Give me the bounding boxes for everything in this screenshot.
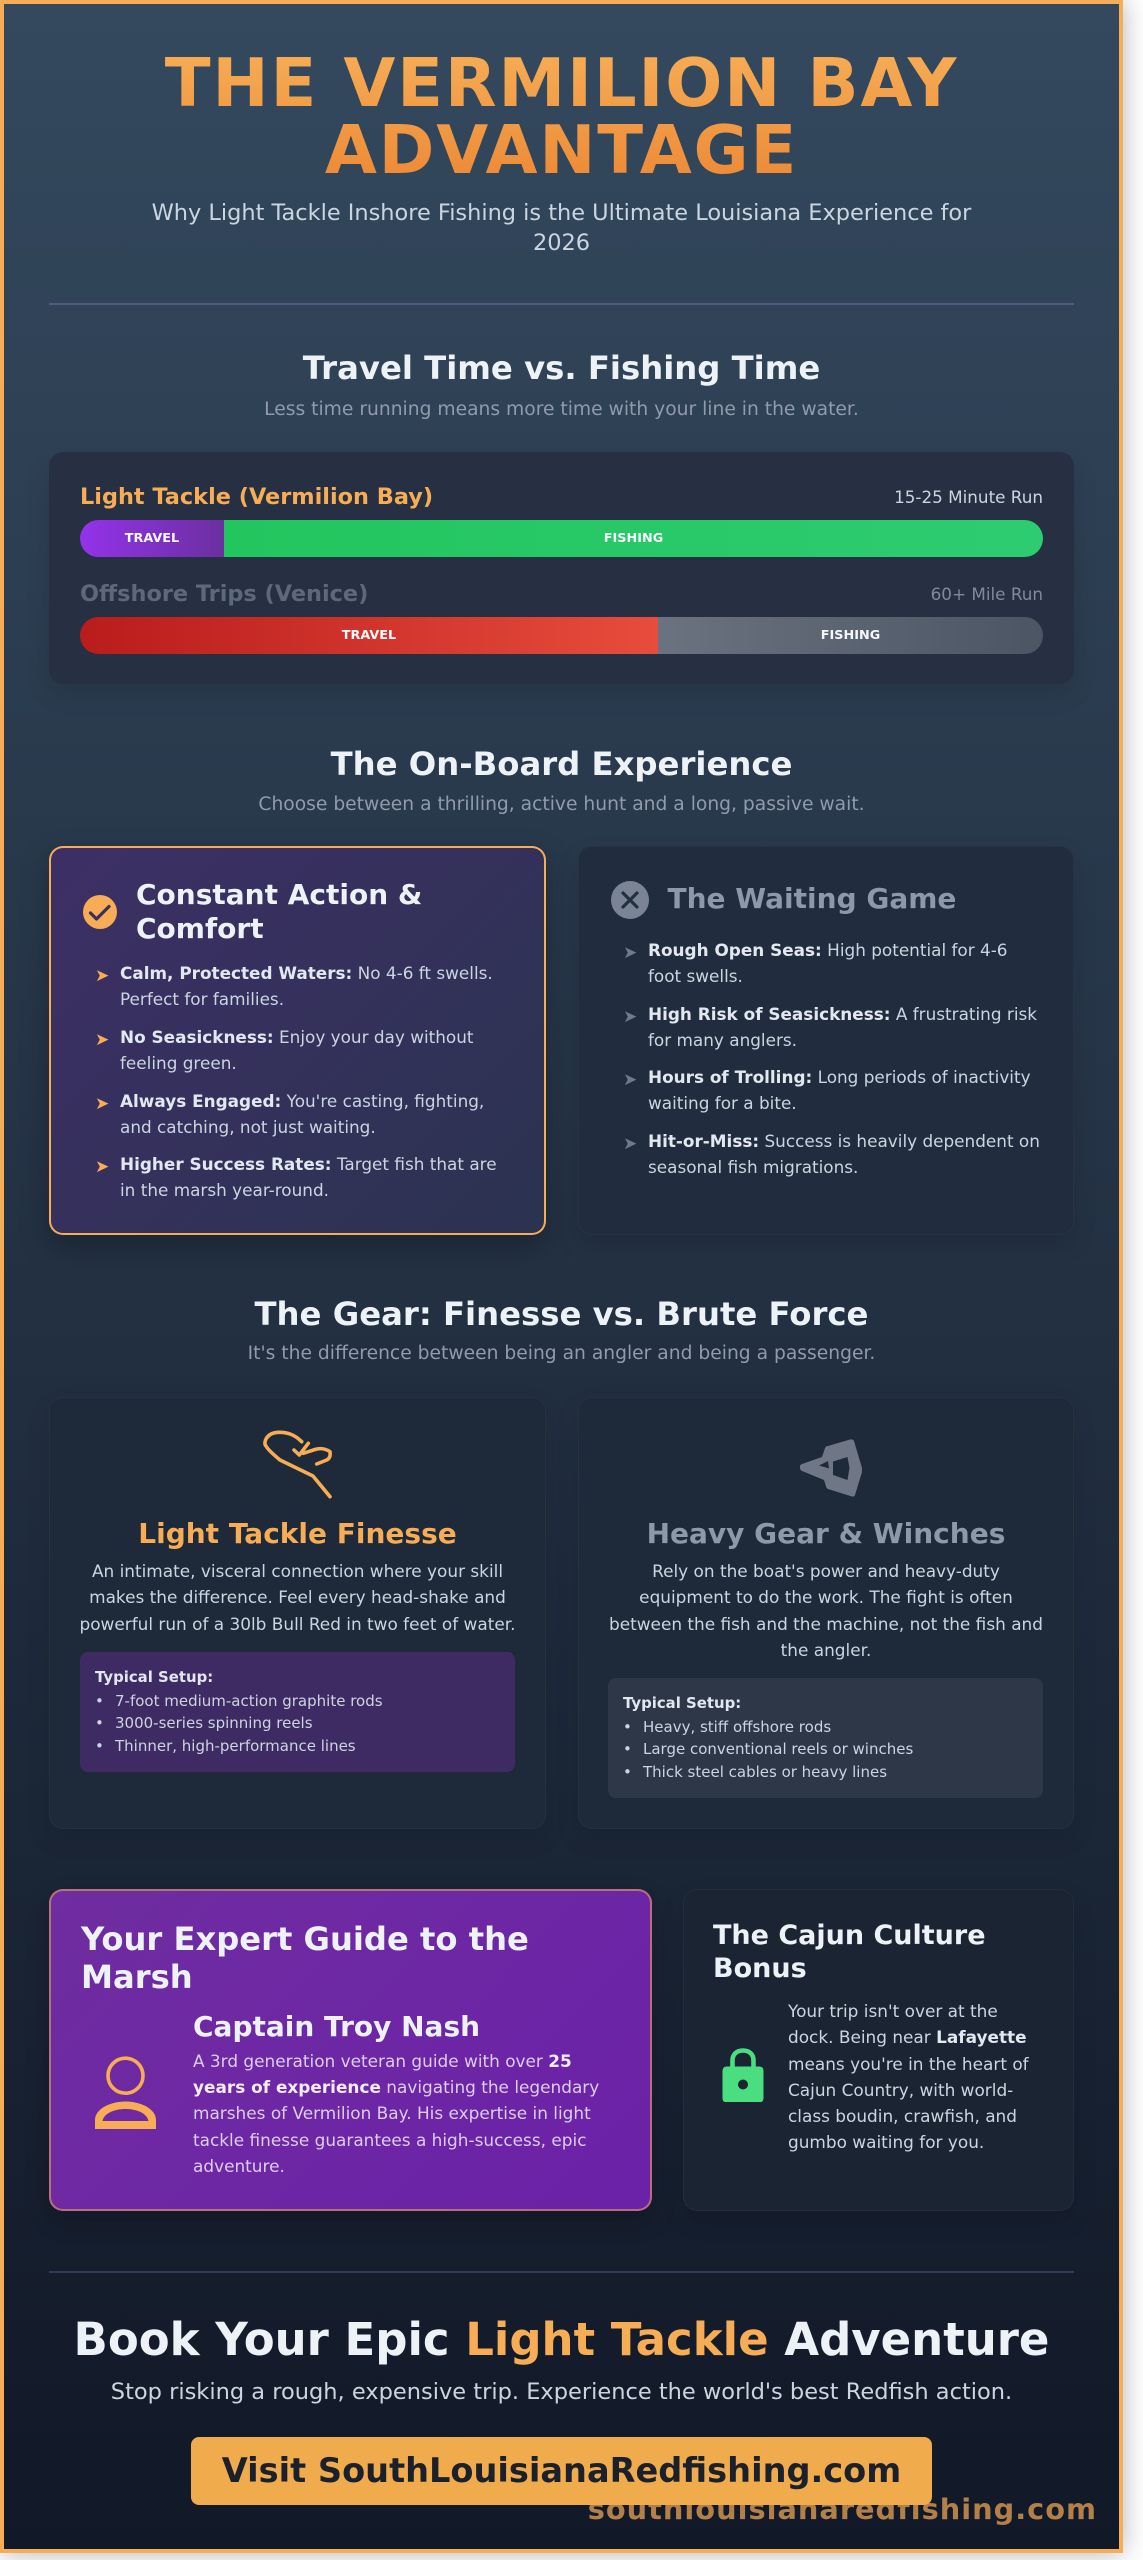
setup item: Thinner, high-performance lines xyxy=(115,1736,356,1754)
description: class boudin, crawfish, and xyxy=(788,2106,1017,2126)
description: Rely on the boat's power and heavy-duty xyxy=(652,1561,1000,1581)
segment: fishing: FISHING xyxy=(604,531,663,546)
icon: winch xyxy=(800,1439,862,1497)
description xyxy=(79,1561,516,1634)
list item xyxy=(623,1004,1037,1050)
list item: feeling green. xyxy=(120,1053,237,1073)
value: offshore run: 60+ Mile Run xyxy=(931,584,1043,604)
title: ADVANTAGE xyxy=(325,111,798,189)
segment: travel xyxy=(80,520,224,557)
captain bio xyxy=(193,2051,599,2176)
description xyxy=(609,1561,1043,1660)
captain name: Captain Troy Nash xyxy=(193,2010,480,2042)
panel: waiting game xyxy=(578,846,1074,1235)
description: means you're in the heart of xyxy=(788,2054,1029,2074)
list item xyxy=(95,963,493,1009)
description: dock. Being near Lafayette xyxy=(788,2027,1027,2047)
setup box xyxy=(608,1678,1043,1798)
list item xyxy=(623,1067,1031,1113)
setup item: 3000-series spinning reels xyxy=(115,1714,313,1732)
title: THE VERMILION BAY xyxy=(165,44,958,122)
description: Cajun Country, with world- xyxy=(788,2080,1013,2100)
list item: Perfect for families. xyxy=(120,989,284,1009)
panel: expert guide xyxy=(49,1889,652,2211)
panel: constant action: ➤ xyxy=(95,1094,109,1114)
list item: Always Engaged: You're casting, fighting, xyxy=(120,1090,484,1110)
list item: No Seasickness: Enjoy your day without xyxy=(120,1027,474,1047)
icon: person xyxy=(95,2056,156,2129)
description: Your trip isn't over at the xyxy=(788,2001,998,2021)
segment: fishing xyxy=(658,617,1043,654)
setup heading: Typical Setup: xyxy=(95,1668,213,1686)
description: gumbo waiting for you. xyxy=(788,2132,984,2152)
card title: Constant Action & xyxy=(136,878,422,911)
setup box: • xyxy=(623,1762,632,1780)
captain bio: marshes of Vermilion Bay. His expertise in light xyxy=(193,2103,591,2123)
description: powerful run of a 30lb Bull Red in two feet of water. xyxy=(79,1614,516,1634)
icon: fishing hook xyxy=(263,1430,332,1499)
panel: travel time comparison xyxy=(49,452,1074,684)
setup heading: Typical Setup: xyxy=(623,1694,741,1712)
captain bio: adventure. xyxy=(193,2156,285,2176)
panel: waiting game: ➤ xyxy=(623,1070,637,1090)
title xyxy=(0,50,1123,184)
call to action text: Stop risking a rough, expensive trip. Experience the world's best Redfish action. xyxy=(111,2379,1012,2405)
list item xyxy=(623,940,1008,986)
panel: constant action: ➤ xyxy=(95,966,109,986)
panel: constant action: ➤ xyxy=(95,1030,109,1050)
description: makes the difference. Feel every head-shake and xyxy=(89,1587,506,1607)
setup box: • xyxy=(95,1714,104,1732)
panel: waiting game: ➤ xyxy=(623,1134,637,1154)
setup box: • xyxy=(95,1736,104,1754)
label: light tackle: Light Tackle (Vermilion Bay) xyxy=(80,484,433,510)
card title: The Cajun Culture xyxy=(713,1920,986,1951)
segment: fishing xyxy=(224,520,1043,557)
panel: constant action xyxy=(49,846,546,1235)
setup box: • xyxy=(623,1740,632,1758)
card title: Heavy Gear & Winches xyxy=(647,1517,1005,1550)
setup box: • xyxy=(623,1718,632,1736)
list item: High Risk of Seasickness: A frustrating risk xyxy=(648,1004,1037,1024)
list item xyxy=(95,1027,474,1073)
setup item: Large conventional reels or winches xyxy=(643,1740,913,1758)
segment: travel xyxy=(80,617,658,654)
description xyxy=(788,2001,1029,2152)
captain bio: tackle finesse guarantees a high-success, epic xyxy=(193,2130,586,2150)
description: the angler. xyxy=(781,1640,871,1660)
card title: Light Tackle Finesse xyxy=(138,1517,457,1550)
subheading: travel time: Less time running means more time with your line in the water. xyxy=(264,398,859,420)
card title xyxy=(136,878,422,945)
panel: waiting game: ➤ xyxy=(623,943,637,963)
panel: constant action: ➤ xyxy=(95,1157,109,1177)
setup box xyxy=(80,1652,515,1772)
captain bio: years of experience navigating the legendary xyxy=(193,2077,599,2097)
card title xyxy=(80,1920,529,1996)
card title: The Waiting Game xyxy=(668,882,956,915)
segment: travel: TRAVEL xyxy=(342,628,396,643)
panel: light tackle finesse xyxy=(49,1397,546,1829)
subtitle: Why Light Tackle Inshore Fishing is the Ultimate Louisiana Experience for xyxy=(152,200,971,226)
list item: in the marsh year-round. xyxy=(120,1180,329,1200)
value: light tackle run: 15-25 Minute Run xyxy=(894,487,1043,507)
description: An intimate, visceral connection where your skill xyxy=(92,1561,503,1581)
list item: Higher Success Rates: Target fish that are xyxy=(120,1154,497,1174)
list item: for many anglers. xyxy=(648,1030,797,1050)
button: visit website xyxy=(191,2437,932,2505)
card title xyxy=(713,1920,986,1984)
card title: Your Expert Guide to the xyxy=(81,1920,529,1958)
subtitle xyxy=(152,200,972,256)
list item: Hit-or-Miss: Success is heavily dependent on xyxy=(648,1131,1040,1151)
setup box: • xyxy=(95,1692,104,1710)
bar: offshore time split xyxy=(80,617,1043,654)
icon: lock xyxy=(722,2048,764,2102)
captain bio: A 3rd generation veteran guide with over 25 xyxy=(193,2051,572,2071)
list item: Hours of Trolling: Long periods of inactivity xyxy=(648,1067,1031,1087)
watermark: southlouisianaredfishing.com xyxy=(588,2492,1097,2526)
panel: heavy gear xyxy=(578,1397,1074,1829)
heading: call to action: Book Your Epic Light Tackle Adventure xyxy=(74,2313,1049,2366)
heading: gear: The Gear: Finesse vs. Brute Force xyxy=(255,1295,868,1333)
bar: light tackle time split xyxy=(80,520,1043,557)
setup item: Heavy, stiff offshore rods xyxy=(643,1718,831,1736)
list item xyxy=(95,1090,484,1137)
list item xyxy=(95,1154,497,1200)
setup item: Thick steel cables or heavy lines xyxy=(643,1762,887,1780)
card title: Bonus xyxy=(713,1953,807,1984)
heading: travel time: Travel Time vs. Fishing Time xyxy=(303,349,820,387)
card title: Comfort xyxy=(136,912,264,945)
panel: waiting game: ➤ xyxy=(623,1006,637,1026)
icon: cross xyxy=(611,881,649,919)
list item: Calm, Protected Waters: No 4-6 ft swells. xyxy=(120,963,493,983)
segment: fishing: FISHING xyxy=(821,628,880,643)
setup item: 7-foot medium-action graphite rods xyxy=(115,1692,383,1710)
heading: on-board experience: The On-Board Experience xyxy=(331,745,792,783)
button: visit website: Visit SouthLouisianaRedfishing.com xyxy=(222,2451,901,2490)
segment: travel: TRAVEL xyxy=(125,531,179,546)
subtitle: 2026 xyxy=(533,230,590,256)
list item: Rough Open Seas: High potential for 4-6 xyxy=(648,940,1008,960)
list item xyxy=(623,1131,1040,1177)
subheading: on-board experience: Choose between a thrilling, active hunt and a long, passive wait. xyxy=(258,794,865,814)
description: equipment to do the work. The fight is often xyxy=(639,1587,1013,1607)
list item: seasonal fish migrations. xyxy=(648,1157,858,1177)
label: offshore: Offshore Trips (Venice) xyxy=(80,580,368,606)
subheading: gear: It's the difference between being an angler and being a passenger. xyxy=(248,1342,875,1364)
list item: and catching, not just waiting. xyxy=(120,1117,376,1137)
panel: cajun culture xyxy=(683,1889,1074,2211)
card title: Marsh xyxy=(81,1958,193,1996)
description: between the fish and the machine, not the fish and xyxy=(609,1614,1043,1634)
icon: check xyxy=(83,895,117,929)
list item: foot swells. xyxy=(648,966,743,986)
list item: waiting for a bite. xyxy=(648,1093,797,1113)
